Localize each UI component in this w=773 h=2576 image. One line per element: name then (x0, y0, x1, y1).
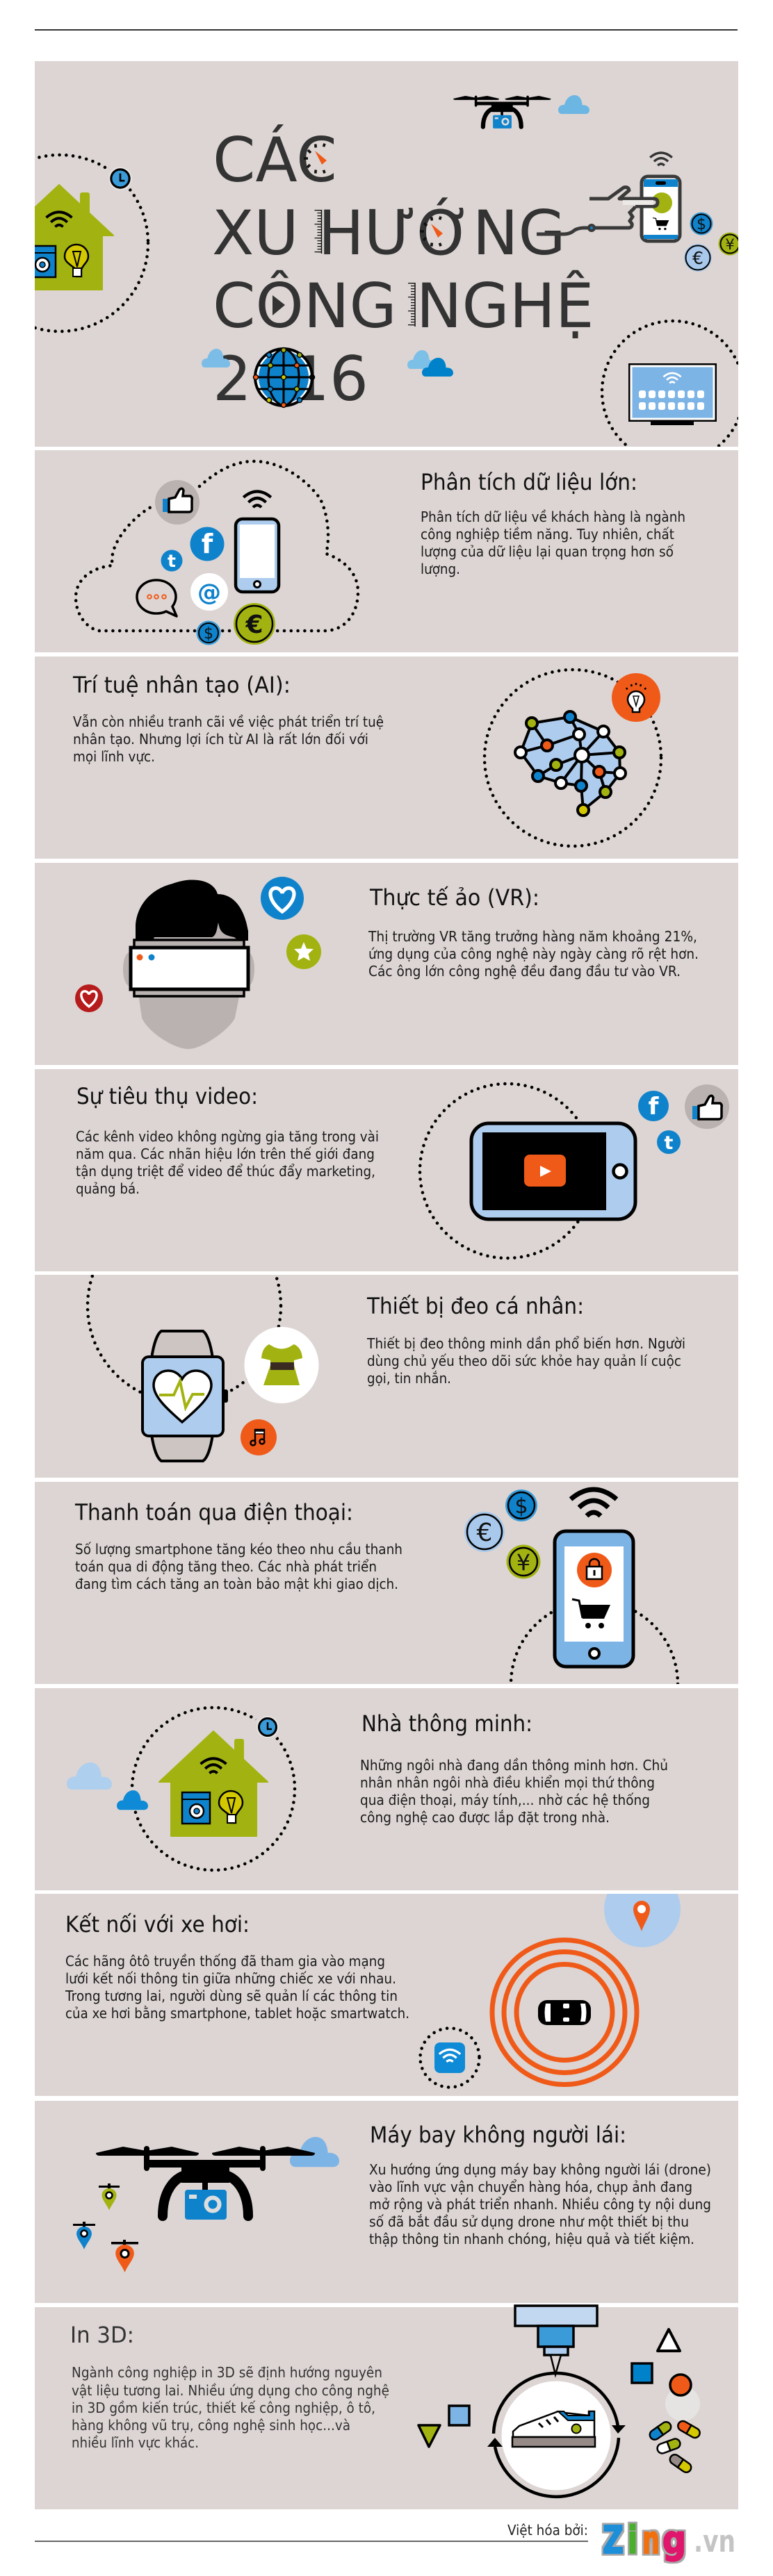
icon: orange circle (670, 2375, 691, 2395)
title: Các xu hướng công nghệ 2016: 2016 (213, 343, 368, 415)
text block: Thiết bị đeo thông minh dần phổ biến hơn. Người (366, 1335, 685, 1352)
icon: globe (253, 347, 314, 407)
logo: Zing.vn: i (628, 2518, 637, 2562)
icon: yen coin: ¥ (516, 1549, 530, 1576)
credit text: Việt hóa bởi: (507, 2522, 588, 2538)
text block: đang tìm cách tăng an toàn bảo mật khi giao dịch. (75, 1576, 398, 1592)
text block: Trong tương lai, người dùng sẽ quản lí các thông tin (65, 1988, 398, 2004)
text block (75, 1541, 402, 1592)
title: Các xu hướng công nghệ 2016: CÁC (213, 124, 339, 196)
text block (73, 713, 384, 765)
text block (366, 1335, 685, 1387)
text block: Những ngôi nhà đang dần thông minh hơn. Chủ (360, 1757, 668, 1774)
text block: năm qua. Các nhãn hiệu lớn trên thế giới đang (76, 1146, 375, 1162)
icon: facebook (638, 1091, 669, 1121)
icon: camera drone (453, 96, 551, 129)
text block: nhân tạo. Nhưng lợi ích từ AI là rất lớn đối với (73, 731, 368, 748)
heading: Nhà thông minh: (361, 1710, 532, 1737)
icon: currency coins: € (692, 248, 703, 268)
icon: smart clothing (245, 1327, 318, 1403)
text block: mọi lĩnh vực. (73, 748, 155, 765)
logo: Zing.vn: .vn (694, 2524, 735, 2559)
icon: white triangle (658, 2329, 680, 2351)
icon: green triangle (418, 2425, 440, 2447)
text block: lượng của dữ liệu lại quan trọng hơn số (421, 543, 674, 560)
heading: In 3D: (70, 2322, 134, 2348)
icon: dotted orbit (420, 1084, 594, 1258)
icon: dollar coin (196, 621, 221, 645)
icon: dollar coin: $ (514, 1494, 528, 1519)
text block: quảng bá. (76, 1180, 140, 1197)
title: Các xu hướng công nghệ 2016: CÔNG NGHỆ (213, 270, 594, 342)
text block: Xu hướng ứng dụng máy bay không người lái (drone) (369, 2161, 711, 2178)
text block: dùng chủ yếu theo dõi sức khỏe hay quản lí cuộc (367, 1353, 681, 1369)
logo: Zing.vn: n (642, 2518, 660, 2562)
panel: mobile payment (35, 1482, 738, 1684)
panel: virtual reality (35, 863, 738, 1065)
icon: tumblr: t (168, 551, 176, 571)
icon: euro coin (234, 603, 275, 645)
icon: tumblr (657, 1130, 681, 1154)
logo: Zing.vn (603, 2518, 735, 2562)
icon: blue square (632, 2363, 652, 2383)
icon: facebook: f (202, 529, 213, 559)
icon: pale circle (665, 2386, 700, 2421)
heading: Sự tiêu thụ video: (76, 1083, 258, 1109)
icon: dotted orbit (485, 670, 661, 846)
text block (76, 1128, 379, 1197)
text block: của xe hơi bằng smartphone, tablet hoặc smartwatch. (65, 2005, 409, 2022)
icon: music note badge (241, 1419, 277, 1455)
icon: printer head (515, 2306, 597, 2375)
icon: printed shoe in rotating ring (487, 2373, 626, 2497)
panel: wearables (35, 1275, 738, 1478)
panel: connected car (35, 1894, 738, 2096)
icon: lightbulb badge (612, 673, 660, 722)
text block: Số lượng smartphone tăng kéo theo nhu cầu thanh (75, 1541, 402, 1558)
icon: payment phone (555, 1531, 633, 1667)
icon: smartwatch with heart rate (143, 1331, 228, 1461)
text block (421, 509, 685, 577)
icon: clock (254, 1713, 282, 1741)
icon: currency coins: ¥ (725, 236, 735, 253)
text block: lưới kết nối thông tin giữa những chiếc xe với nhau. (65, 1970, 396, 1987)
text block: toán qua di động tăng theo. Các nhà phát triển (75, 1558, 377, 1575)
text block (72, 2364, 389, 2451)
heading: Phân tích dữ liệu lớn: (421, 469, 637, 495)
text block: thập thông tin nhanh chóng, hiệu quả và tiết kiệm. (369, 2231, 694, 2247)
text block: Phân tích dữ liệu về khách hàng là ngành (421, 509, 685, 525)
text block: nhiều lĩnh vực khác. (72, 2434, 199, 2451)
text block: qua điện thoại, máy tính,... nhờ các hệ thống (360, 1792, 650, 1808)
icon: currency coins (684, 213, 741, 272)
panel: drones (35, 2101, 738, 2303)
icon: smartphone (236, 519, 279, 592)
text block: in 3D gồm kiến trúc, thiết kế công nghiệp, ô tô, (72, 2400, 375, 2416)
text block: nhân nhân ngôi nhà điều khiển mọi thứ thông (360, 1774, 655, 1791)
icon: euro coin: € (477, 1519, 492, 1547)
icon: orange mini drone (111, 2240, 138, 2272)
icon: dotted orbit (132, 1708, 295, 1870)
text block: Các kênh video không ngừng gia tăng trong vài (76, 1128, 379, 1145)
panel: 3D printing (35, 2306, 738, 2509)
icon: wifi (243, 491, 271, 507)
heading: Trí tuệ nhân tạo (AI): (72, 672, 291, 698)
icon: cloud (290, 2137, 339, 2167)
text block: Các ông lớn công nghệ đều đang đầu tư vào VR. (368, 963, 681, 980)
panel: smart home (35, 1688, 738, 1890)
text block: Các hãng ôtô truyền thống đã tham gia vào mạng (65, 1953, 385, 1970)
icon: hand tapping phone (537, 153, 680, 241)
text block: công nghệ cao được lắp đặt trong nhà. (360, 1809, 610, 1826)
title: Các xu hướng công nghệ 2016 (212, 124, 594, 415)
icon: thumbs up (685, 1084, 729, 1129)
icon: euro coin: € (245, 611, 263, 639)
icon: dotted cloud outline (76, 461, 358, 631)
text block: Vẫn còn nhiều tranh cãi về việc phát triển trí tuệ (73, 713, 384, 730)
icon: tumblr (161, 550, 182, 571)
heading: Thực tế ảo (VR): (369, 884, 539, 911)
text block: lượng. (421, 561, 460, 577)
text block: Thị trường VR tăng trưởng hàng năm khoảng 21%, (368, 928, 697, 945)
panel: video consumption (35, 1069, 738, 1271)
top rule (35, 29, 738, 31)
text block: công nghiệp tiềm năng. Tuy nhiên, chất (421, 526, 674, 543)
icon: wifi (571, 1489, 617, 1516)
text block: Ngành công nghiệp in 3D sẽ định hướng nguyên (72, 2364, 382, 2381)
logo: Zing.vn: Z (603, 2518, 624, 2562)
text block: gọi, tin nhắn. (367, 1370, 451, 1387)
icon: tablet with keyboard in dotted orbit (601, 320, 738, 447)
icon: yen coin (506, 1545, 541, 1578)
icon: dollar coin (505, 1489, 537, 1521)
icon: clouds around title (202, 95, 589, 377)
text block (369, 2161, 711, 2247)
icon: speech bubble (137, 580, 177, 616)
icon: facebook: f (649, 1093, 660, 1121)
icon: email: @ (197, 579, 221, 606)
icon: camera drone (96, 2146, 315, 2220)
icon: dotted orbit (509, 1610, 680, 1684)
heading: Thanh toán qua điện thoại: (74, 1499, 353, 1526)
panel: artificial intelligence (35, 657, 738, 859)
text block: tận dụng triệt để video để thúc đẩy marketing, (76, 1163, 375, 1180)
icon: currency coins: $ (697, 216, 706, 233)
panel: title header (0, 61, 744, 463)
icon: phone playing video (471, 1123, 635, 1219)
text block: vật liệu tương lai. Nhiều ứng dụng cho công nghệ (72, 2382, 389, 2399)
heading: Kết nối với xe hơi: (65, 1911, 250, 1938)
icon: dollar coin: $ (204, 625, 213, 643)
icon: tumblr: t (665, 1132, 674, 1154)
icon: person wearing VR headset (123, 880, 254, 1049)
text block: ứng dụng của công nghệ này ngày càng rõ rệt hơn. (368, 946, 699, 962)
text block (65, 1953, 409, 2022)
icon: green mini drone (99, 2183, 120, 2211)
footer rule (35, 2541, 588, 2542)
icon: location pin badge (604, 1894, 681, 1947)
icon: blue mini drone (73, 2222, 95, 2249)
icon: light blue square (449, 2406, 469, 2425)
icon: thumbs up (155, 480, 200, 525)
icon: material pills (648, 2419, 701, 2474)
heading: Thiết bị đeo cá nhân: (366, 1293, 584, 1319)
icon: smart home in dotted orbit (35, 153, 150, 333)
icon: signal rings (492, 1940, 637, 2084)
text block: vào lĩnh vực vận chuyển hàng hóa, chụp ảnh đang (369, 2179, 692, 2195)
text block (360, 1757, 668, 1826)
icon: car top view (538, 2000, 591, 2025)
text block: mở rộng và phát triển nhanh. Nhiều công ty nội dung (369, 2196, 711, 2213)
text block (368, 928, 699, 980)
icon: wifi in dotted orbit (420, 2029, 480, 2087)
icon: star badge (286, 934, 321, 969)
icon: red heart badge (75, 984, 103, 1012)
icon: euro coin (464, 1512, 505, 1552)
icon: smart house (159, 1731, 268, 1836)
logo: Zing.vn: g (662, 2518, 686, 2562)
heading: Máy bay không người lái: (370, 2122, 626, 2148)
icon: dotted orbit (86, 1275, 282, 1394)
text block: số đã bắt đầu sử dụng drone như một thiết bị thu (369, 2213, 689, 2230)
icon: clouds (67, 1762, 148, 1810)
icon: facebook (190, 527, 224, 561)
icon: neural brain network (515, 711, 626, 816)
icon: blue heart badge (261, 877, 304, 920)
icon: email (190, 573, 228, 611)
title: Các xu hướng công nghệ 2016: XU HƯỚNG (212, 197, 566, 269)
text block: hàng không vũ trụ, công nghệ sinh học...và (72, 2417, 350, 2434)
panel: big data (35, 450, 738, 652)
